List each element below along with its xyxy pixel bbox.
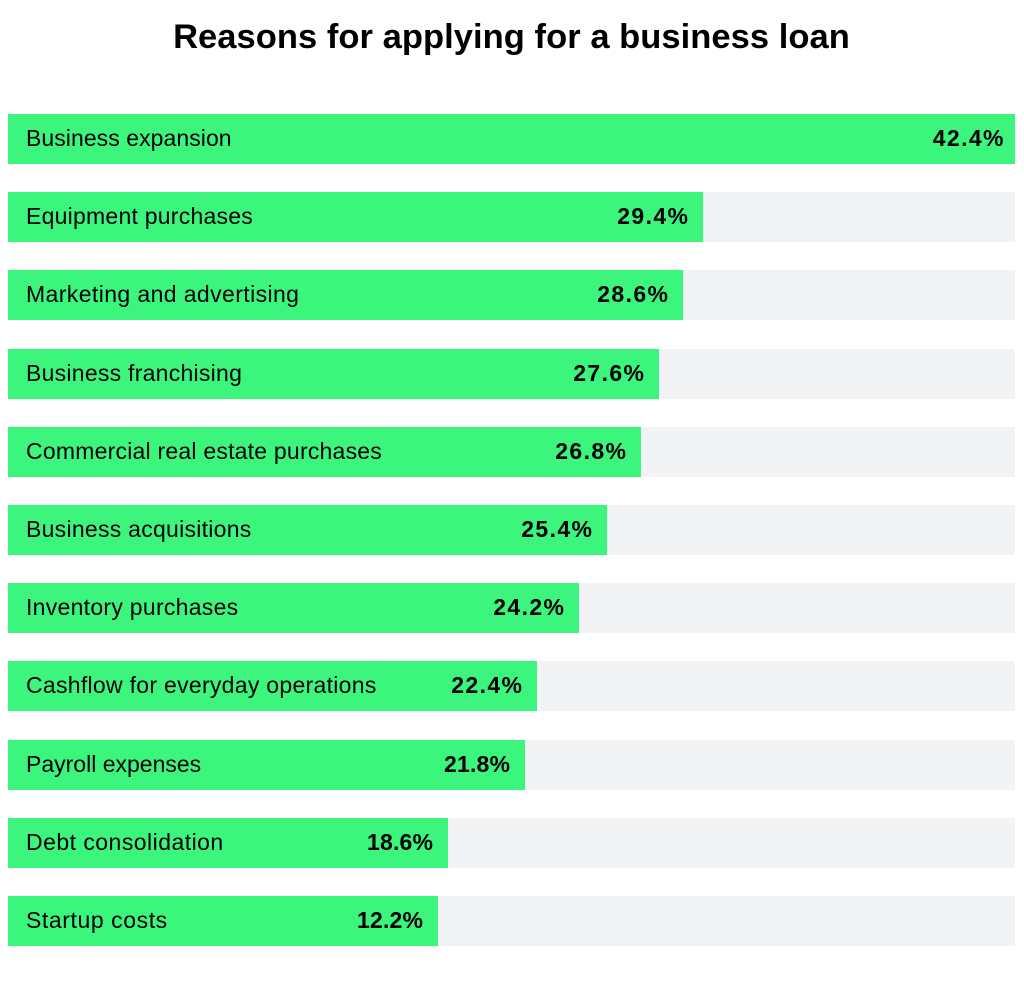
bar: Cashflow for everyday operations: Cashflow for everyday operations (26, 672, 377, 698)
bar: Inventory purchases: Inventory purchases (26, 594, 238, 620)
bar: Payroll expenses (8, 740, 1015, 790)
bar: Startup costs: Startup costs (26, 907, 168, 933)
bar: Cashflow for everyday operations (8, 661, 1015, 711)
bar: Cashflow for everyday operations: 22.4% (451, 672, 523, 698)
bar: Startup costs: 12.2% (357, 907, 423, 933)
bar: Business expansion: Business expansion (26, 125, 232, 151)
bar: Debt consolidation: 18.6% (367, 829, 433, 855)
bar: Business franchising: Business franchising (26, 360, 242, 386)
bar: Business acquisitions: 25.4% (521, 516, 593, 542)
bar: Commercial real estate purchases (8, 427, 1015, 477)
bar: Inventory purchases (8, 583, 1015, 633)
bar: Debt consolidation: Debt consolidation (26, 829, 224, 855)
bar: Commercial real estate purchases: 26.8% (555, 438, 627, 464)
bar: Payroll expenses: 21.8% (444, 751, 510, 777)
bar: Business acquisitions (8, 505, 1015, 555)
bar: Inventory purchases: 24.2% (493, 594, 565, 620)
bar: Equipment purchases: Equipment purchases (26, 203, 253, 229)
bar: Equipment purchases (8, 192, 1015, 242)
bar: Marketing and advertising: Marketing and advertising (26, 281, 299, 307)
title: Reasons for applying for a business loan (173, 18, 850, 56)
bar: Business expansion: 42.4% (933, 125, 1005, 151)
bar: Business franchising: 27.6% (573, 360, 645, 386)
bar: Business acquisitions: Business acquisitions (26, 516, 252, 542)
bar: Payroll expenses: Payroll expenses (26, 751, 201, 777)
bar: Debt consolidation (8, 818, 1015, 868)
bar: Business franchising (8, 349, 1015, 399)
bar: Equipment purchases: 29.4% (617, 203, 689, 229)
bar: Commercial real estate purchases: Commercial real estate purchases (26, 438, 382, 464)
bar: Business expansion (8, 114, 1015, 164)
bar: Startup costs (8, 896, 1015, 946)
bar: Marketing and advertising (8, 270, 1015, 320)
bar: Marketing and advertising: 28.6% (597, 281, 669, 307)
